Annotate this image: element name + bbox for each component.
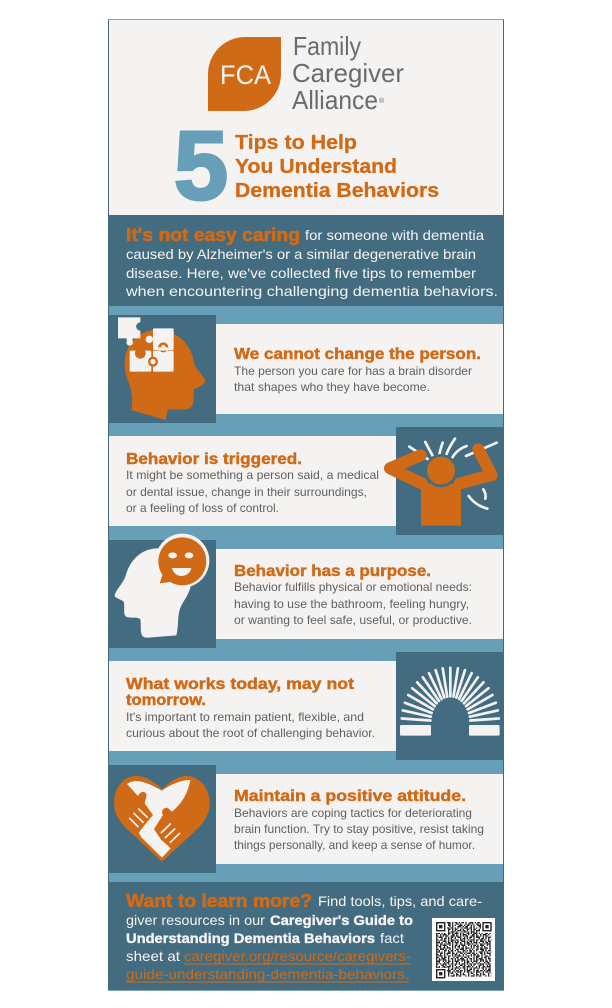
title: Tips to Help <box>235 132 357 154</box>
panel: tip 2: or dental issue, change in their surroundings, <box>126 485 367 499</box>
intro panel <box>109 215 503 306</box>
title: Dementia Behaviors <box>235 180 439 202</box>
panel: tip 4: curious about the root of challenging behavior. <box>126 726 375 740</box>
logo: ® <box>379 97 385 105</box>
icon: heart with clasped hands <box>108 765 216 873</box>
footer panel <box>109 882 503 990</box>
title <box>174 111 439 220</box>
panel: tip 1: The person you care for has a brain disorder <box>234 364 472 378</box>
panel: tip 4: tomorrow. <box>126 692 206 709</box>
footer panel: giver resources in our <box>126 912 265 928</box>
intro panel: for someone with dementia <box>305 227 484 243</box>
panel: tip 2 <box>109 427 504 535</box>
big number 5: 5 <box>174 111 228 220</box>
icon: slinky <box>396 652 504 760</box>
panel: tip 3: or wanting to feel safe, useful, or productive. <box>234 613 472 627</box>
panel: tip 5: things personally, and keep a sense of humor. <box>234 838 475 852</box>
footer panel: Caregiver's Guide to <box>270 912 413 928</box>
panel: tip 3: Behavior has a purpose. <box>234 563 431 580</box>
intro panel: caused by Alzheimer's or a similar degenerative brain <box>126 246 476 262</box>
panel: tip 5: Behaviors are coping tactics for deteriorating <box>234 806 472 820</box>
intro panel: It's not easy caring <box>126 225 300 245</box>
panel: tip 2: Behavior is triggered. <box>126 451 302 468</box>
icon: frustrated person <box>390 427 504 535</box>
icon: head with smiling speech bubble <box>108 534 216 648</box>
panel: tip 1: that shapes who they have become. <box>234 380 430 394</box>
panel: tip 2: or a feeling of loss of control. <box>126 501 279 515</box>
link: caregiver.org/resource/caregivers- <box>184 948 411 964</box>
logo: Alliance <box>292 85 378 115</box>
panel: tip 2: It might be something a person said, a medical <box>126 468 379 482</box>
panel: tip 5: Maintain a positive attitude. <box>234 788 466 805</box>
panel: tip 1 <box>108 315 503 423</box>
panel: tip 3: having to use the bathroom, feeling hungry, <box>234 597 469 611</box>
panel: tip 1: We cannot change the person. <box>234 346 481 363</box>
logo: Family <box>293 31 361 61</box>
intro panel: disease. Here, we've collected five tips to remember <box>126 265 476 281</box>
footer panel: sheet at <box>126 948 180 964</box>
panel: tip 4: What works today, may not <box>126 676 354 693</box>
QR code <box>432 918 495 981</box>
panel: tip 3: Behavior fulfills physical or emotional needs: <box>234 580 472 594</box>
panel: tip 3 <box>108 534 503 648</box>
link: guide-understanding-dementia-behaviors. <box>126 966 409 982</box>
logo: Caregiver <box>292 58 404 88</box>
icon: head with puzzle pieces <box>108 315 216 423</box>
logo <box>208 31 404 115</box>
icon: FCA leaf <box>208 37 281 111</box>
footer panel: Understanding Dementia Behaviors <box>126 930 375 946</box>
panel: tip 5: brain function. Try to stay positive, resist taking <box>234 822 484 836</box>
panel: tip 5 <box>108 765 503 873</box>
footer panel: fact <box>380 930 404 946</box>
panel: tip 4 <box>109 652 504 760</box>
footer panel: Find tools, tips, and care- <box>318 893 482 909</box>
footer panel: Want to learn more? <box>126 891 312 911</box>
panel: tip 4: It's important to remain patient, flexible, and <box>126 710 364 724</box>
icon: FCA leaf: FCA <box>220 60 271 90</box>
header panel <box>109 20 503 220</box>
link <box>126 948 411 982</box>
title: You Understand <box>235 156 397 178</box>
intro panel: when encountering challenging dementia behaviors. <box>125 283 498 299</box>
